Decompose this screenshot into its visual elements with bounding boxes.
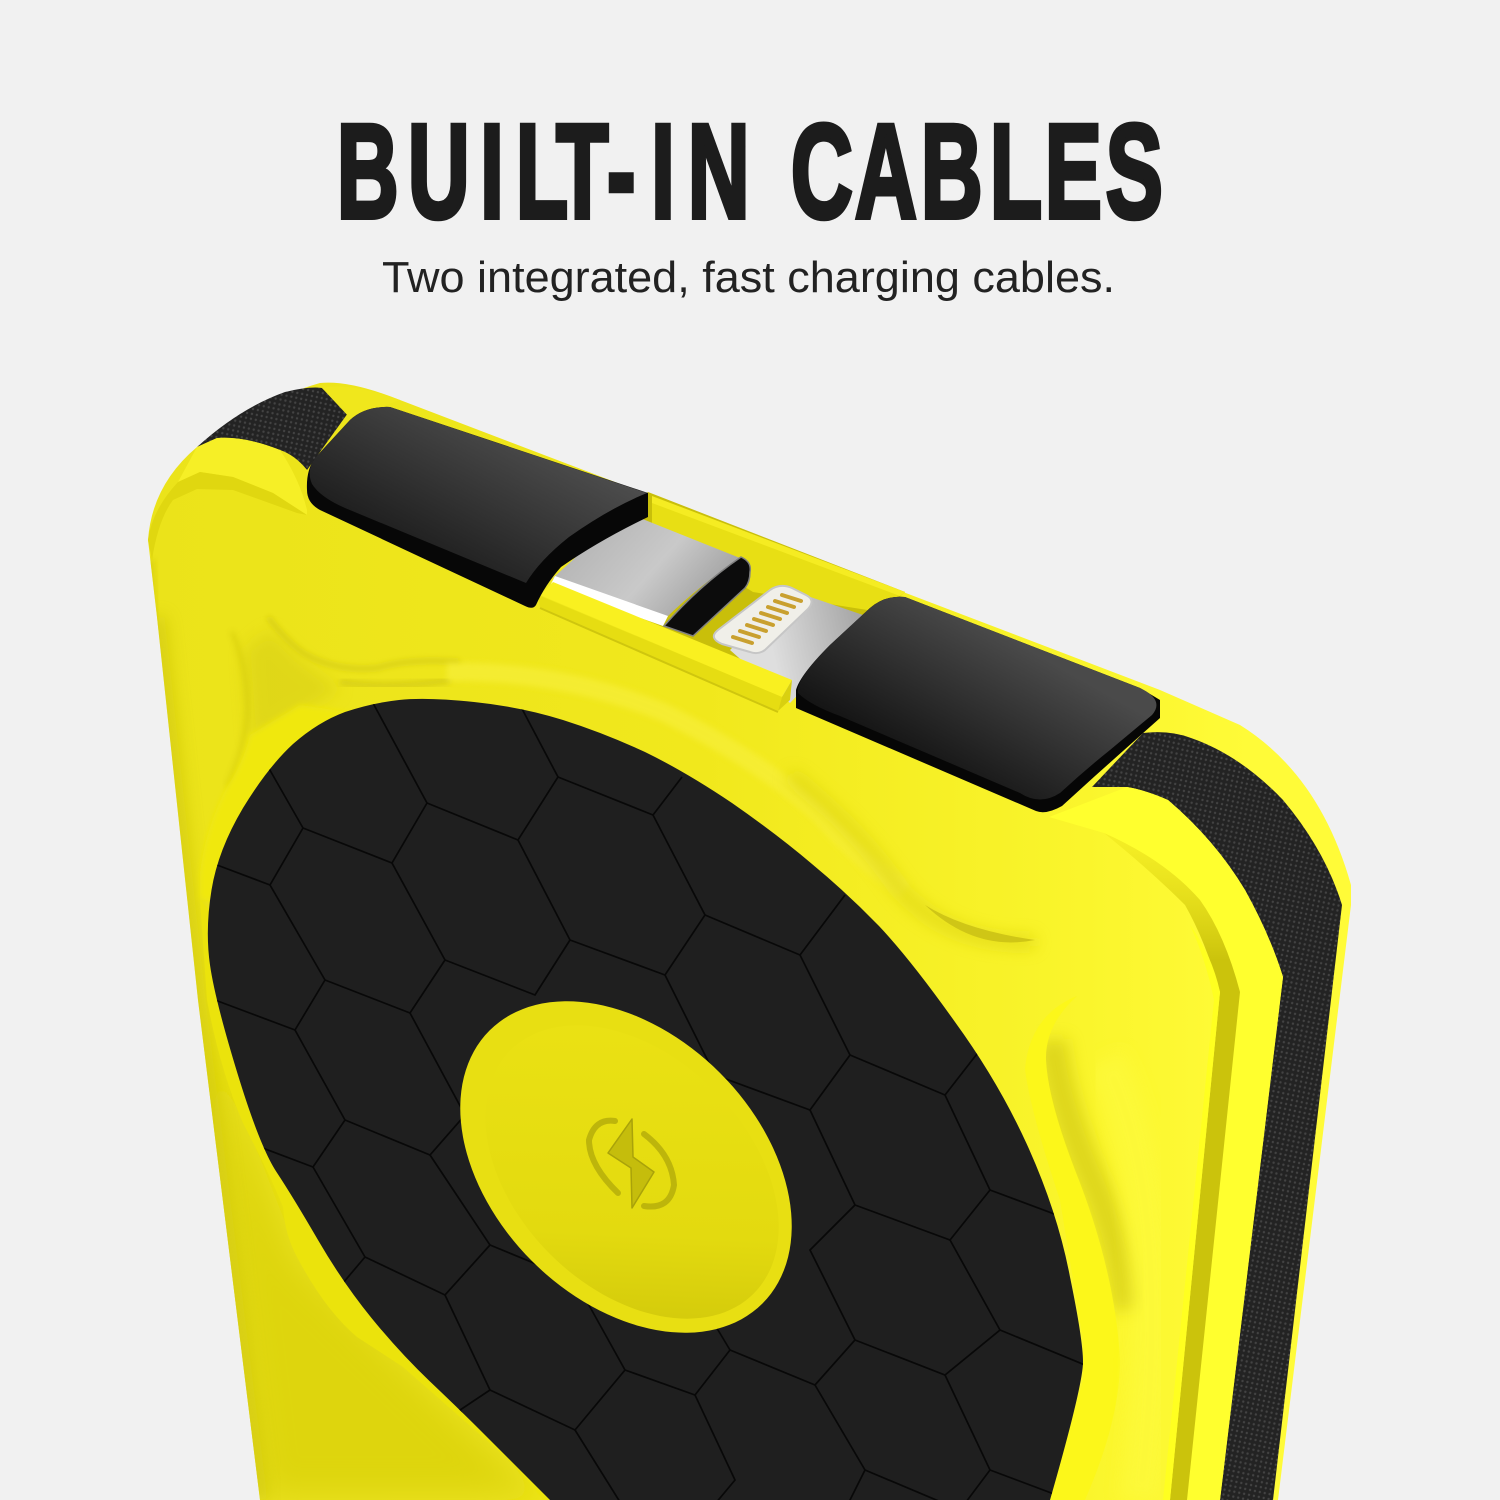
USB-C silver shell xyxy=(553,512,740,617)
cable recess xyxy=(540,492,905,690)
Lightning tip xyxy=(714,586,812,653)
disc base xyxy=(208,699,1083,1500)
title: BUILT-IN CABLES xyxy=(337,96,1163,246)
front yellow retaining bar xyxy=(538,582,792,712)
Lightning gold contacts xyxy=(733,595,801,643)
hexagon grid lines xyxy=(215,703,1085,1500)
USB-C highlight xyxy=(550,576,668,626)
USB-C connector xyxy=(550,512,750,636)
device body xyxy=(148,383,1351,1500)
right bright yellow edge band xyxy=(1049,787,1283,1500)
right thin bright highlight xyxy=(1163,925,1220,1500)
top-left black fabric strap xyxy=(197,388,348,470)
left black cable cap xyxy=(307,407,648,608)
top-left corner lip xyxy=(148,386,400,560)
right black fabric strap xyxy=(1092,732,1342,1500)
USB-C port opening xyxy=(664,557,750,636)
power bank device xyxy=(148,383,1351,1500)
right olive groove band xyxy=(1104,833,1240,1500)
right black cable cap xyxy=(796,597,1160,812)
sculpted shading of the case xyxy=(150,560,1152,1500)
centre yellow button xyxy=(395,936,857,1398)
Lightning connector xyxy=(714,586,866,703)
black hexagon charging disc xyxy=(208,699,1085,1500)
button inner dish xyxy=(428,968,836,1376)
charging bolt logo xyxy=(589,1119,674,1208)
Lightning metal body xyxy=(730,590,866,703)
subtitle: Two integrated, fast charging cables. xyxy=(382,253,1115,302)
